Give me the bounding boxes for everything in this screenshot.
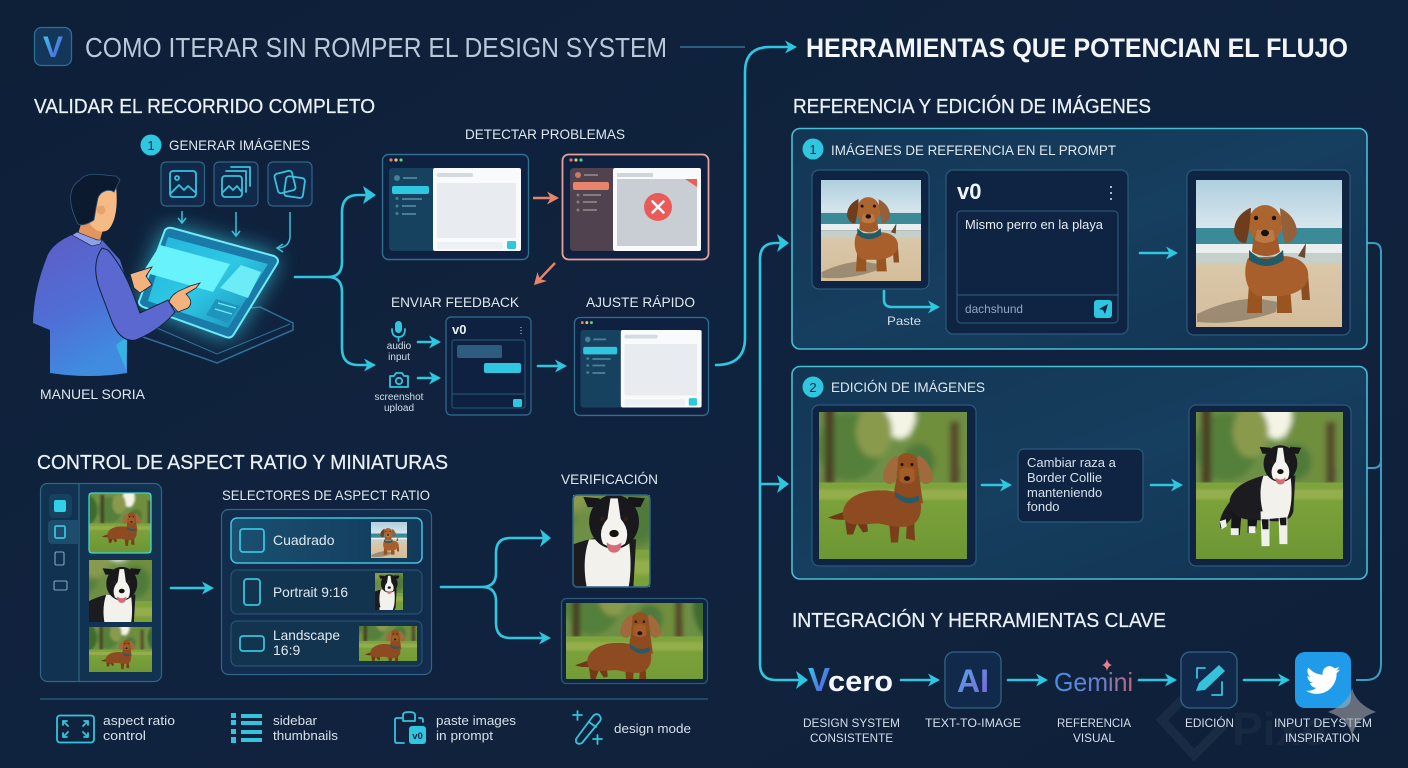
selector: cuadrado: Cuadrado <box>273 532 335 548</box>
legend: aspect ratio control: aspect ratio <box>103 713 175 728</box>
labels: tool captions: REFERENCIA <box>1057 716 1131 730</box>
labels: tool captions: EDICIÓN <box>1185 715 1234 730</box>
panel: sidebar thumbnails <box>0 474 245 738</box>
heading: validar: VALIDAR EL RECORRIDO COMPLETO <box>34 96 375 118</box>
selector: portrait: Portrait 9:16 <box>273 584 348 600</box>
logo: V <box>43 31 63 64</box>
icon: twitter <box>1295 652 1351 708</box>
watermark: Pixe <box>1232 703 1327 755</box>
label: paste: Paste <box>887 314 921 328</box>
panel: v0 prompt: Mismo perro en la playa <box>965 217 1104 232</box>
heading: detectar problemas: DETECTAR PROBLEMAS <box>465 126 625 142</box>
logo: vcero <box>808 661 893 698</box>
icon: ai <box>945 652 1001 708</box>
panel: aspect ratio selectors <box>222 510 456 699</box>
step badge and title: EDICIÓN DE IMÁGENES <box>831 379 985 395</box>
selector: landscape: Landscape <box>273 627 340 643</box>
panel: v0 chat: v0 <box>452 322 466 337</box>
step label: generar imagenes <box>140 134 310 156</box>
arrow: thumbnails to selectors <box>171 587 211 589</box>
arrow: chat to adjust <box>538 365 564 367</box>
arrow: ai to gemini <box>1008 679 1045 681</box>
arrow: fork upper head <box>540 529 551 547</box>
connector: left bus <box>760 243 804 680</box>
box: edit instruction <box>1018 449 1143 522</box>
logo: vcero: cero <box>828 666 893 698</box>
connector: right bus <box>1356 243 1381 680</box>
divider <box>40 698 708 700</box>
legend: aspect ratio control <box>57 713 175 743</box>
selector: landscape <box>231 591 446 699</box>
icon: audio input: input <box>388 352 410 363</box>
heading: verificacion: VERIFICACIÓN <box>561 471 658 487</box>
window: app with error <box>562 154 708 260</box>
window: app ok <box>382 154 528 260</box>
icon: screenshot upload: screenshot <box>375 392 424 403</box>
label: manuel soria: MANUEL SORIA <box>40 386 146 402</box>
title connector <box>680 46 745 48</box>
arrow: gemini to edit <box>1139 679 1174 681</box>
arrows: inputs to tablet <box>178 211 290 252</box>
step badge and title: 2 <box>809 380 817 395</box>
selector: landscape: 16:9 <box>273 642 300 658</box>
image: source dachshund <box>793 153 951 313</box>
arrow: vcero to ai <box>901 679 937 681</box>
icons: image inputs <box>161 162 312 206</box>
legend: design mode <box>573 711 691 744</box>
legend: sidebar thumbnails: thumbnails <box>273 728 339 743</box>
selector: portrait <box>231 529 456 667</box>
panel: v0 prompt: dachshund <box>965 302 1023 316</box>
legend: paste images: v0 <box>412 731 423 742</box>
step badge and title: IMÁGENES DE REFERENCIA EN EL PROMPT <box>831 142 1116 158</box>
panel: edicion de imagenes <box>752 352 1408 632</box>
logo: vcero: V <box>808 661 830 698</box>
panel: v0 prompt: v0 <box>957 179 981 204</box>
labels: tool captions: DESIGN SYSTEM <box>803 716 900 730</box>
icon: audio input: audio <box>387 341 412 352</box>
arrow: edit to twitter <box>1244 679 1287 681</box>
heading: control de aspect ratio: CONTROL DE ASPECT RATIO Y MINIATURAS <box>37 452 448 474</box>
box: edit instruction: fondo <box>1027 499 1060 514</box>
arrow: fork top head <box>363 186 376 204</box>
step badge and title <box>802 138 1116 160</box>
labels: tool captions: CONSISTENTE <box>810 731 893 745</box>
box: edit instruction: Cambiar raza a <box>1027 455 1117 470</box>
icon: audio input <box>387 321 412 363</box>
icon: screenshot upload: upload <box>384 403 414 414</box>
image: result dachshund <box>1156 140 1386 373</box>
arrow: to result <box>1151 484 1180 486</box>
labels: tool captions: INPUT DEYSTEM <box>1274 716 1372 730</box>
arrow: prompt to result <box>1140 252 1175 254</box>
legend: paste images: in prompt <box>436 728 493 743</box>
image: park dachshund <box>752 352 1039 632</box>
logo: gemini: Gemini <box>1054 667 1133 697</box>
arrow: flow to tools <box>716 47 794 365</box>
legend: paste images: paste images <box>436 713 517 728</box>
heading: ajuste rapido: AJUSTE RÁPIDO <box>586 294 695 310</box>
box: edit instruction: Border Collie <box>1027 470 1102 485</box>
icon: edit <box>1181 652 1237 708</box>
right title: HERRAMIENTAS QUE POTENCIAN EL FLUJO <box>806 33 1348 63</box>
arrow: to feedback <box>536 263 555 283</box>
image: dachshund landscape <box>513 529 748 760</box>
icon: screenshot upload <box>375 373 424 414</box>
labels: tool captions: TEXT-TO-IMAGE <box>925 716 1021 730</box>
step badge and title <box>802 376 985 398</box>
heading: enviar feedback: ENVIAR FEEDBACK <box>391 294 520 310</box>
image: park collie <box>1129 352 1408 632</box>
heading: selectores: SELECTORES DE ASPECT RATIO <box>222 487 430 503</box>
illustration: tablet <box>138 228 293 363</box>
labels: tool captions: VISUAL <box>1073 731 1115 745</box>
heading: referencia y edicion: REFERENCIA Y EDICIÓN DE IMÁGENES <box>793 95 1151 118</box>
arrow: to instruction <box>982 484 1009 486</box>
arrow: paste <box>884 291 937 307</box>
arrow: to problem <box>533 197 556 199</box>
legend: aspect ratio control: control <box>103 728 146 743</box>
legend: sidebar thumbnails: sidebar <box>273 713 318 728</box>
panel: imagenes de referencia <box>792 128 1386 373</box>
heading: integracion: INTEGRACIÓN Y HERRAMIENTAS CLAVE <box>792 609 1166 632</box>
labels: tool captions <box>803 715 1372 745</box>
box: edit instruction: manteniendo <box>1027 485 1102 500</box>
panel: v0 prompt <box>946 170 1128 334</box>
watermark <box>1162 690 1327 755</box>
legend: sidebar thumbnails <box>231 713 339 743</box>
illustration: person <box>33 174 200 376</box>
step badge and title: 1 <box>809 142 817 157</box>
watermark star <box>1328 688 1376 736</box>
legend: paste images <box>395 712 517 744</box>
selector: cuadrado <box>231 512 422 569</box>
window: adjusted app <box>574 317 708 415</box>
legend: design mode: design mode <box>614 721 691 736</box>
arrows: feedback inputs <box>418 342 438 378</box>
image: collie portrait <box>391 358 812 768</box>
step label: generar imagenes: GENERAR IMÁGENES <box>169 137 310 153</box>
arrow: bus heads <box>777 234 808 689</box>
panel: v0 chat <box>446 317 531 415</box>
logo <box>34 28 72 66</box>
step label: generar imagenes: 1 <box>147 138 155 153</box>
arrow: fork to verification <box>441 538 548 638</box>
arrow: fork to windows <box>295 195 373 365</box>
title: COMO ITERAR SIN ROMPER EL DESIGN SYSTEM <box>85 32 667 63</box>
icon: ai: AI <box>957 663 989 699</box>
labels: tool captions: INSPIRATION <box>1285 731 1360 745</box>
